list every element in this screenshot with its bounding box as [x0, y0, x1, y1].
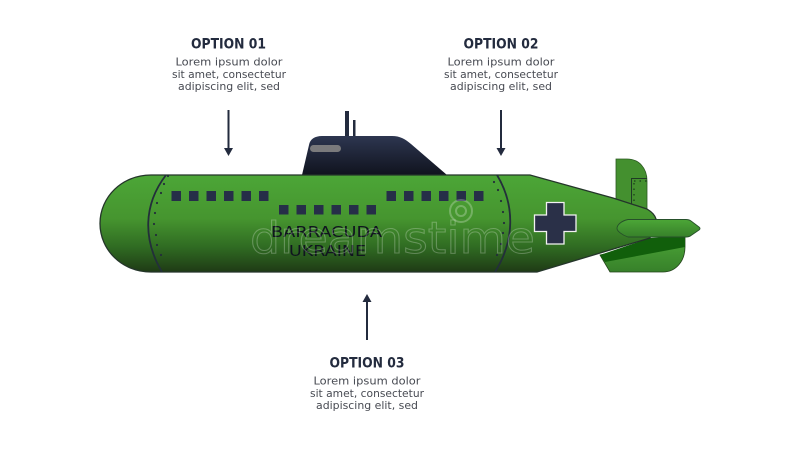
arrow: option 01 — [224, 110, 233, 156]
sail body — [302, 136, 447, 175]
option 02 text block: OPTION 02 — [464, 36, 538, 52]
lower rudder — [600, 236, 685, 272]
option 03 text block: Lorem ipsum dolor — [314, 374, 421, 388]
arrow: option 02 — [496, 110, 506, 156]
arrow: option 03 — [362, 294, 372, 340]
hull — [100, 175, 656, 272]
periscopes — [345, 111, 356, 137]
option 02 text block: adipiscing elit, sed — [450, 80, 552, 93]
option 03 text block — [310, 356, 424, 412]
hull name — [271, 223, 383, 260]
right bulkhead seam — [493, 175, 510, 272]
watermark: dreamstime — [250, 213, 535, 264]
option 02 text block: sit amet, consectetur — [444, 68, 558, 81]
window row left — [172, 191, 268, 201]
option 01 text block: adipiscing elit, sed — [178, 80, 280, 93]
submarine — [100, 111, 700, 272]
option 02 text block: Lorem ipsum dolor — [448, 56, 555, 68]
cross emblem — [534, 202, 576, 244]
option 03 text block: sit amet, consectetur — [310, 387, 424, 400]
hull name: UKRAINE — [289, 242, 366, 260]
conning tower — [302, 111, 447, 175]
stabilizer — [617, 220, 700, 237]
upper rudder — [616, 159, 647, 213]
window row right — [386, 191, 484, 201]
sail highlight — [310, 145, 341, 152]
hull name: BARRACUDA — [271, 223, 383, 241]
option 01 text block: sit amet, consectetur — [172, 68, 286, 81]
option 03 text block: adipiscing elit, sed — [316, 399, 418, 412]
option 02 text block — [444, 36, 558, 93]
window row centre — [279, 205, 376, 214]
left bulkhead seam — [148, 175, 169, 272]
option 01 text block — [172, 36, 286, 93]
option 01 text block: OPTION 01 — [191, 36, 266, 52]
option 03 text block: OPTION 03 — [330, 356, 404, 372]
option 01 text block: Lorem ipsum dolor — [176, 56, 283, 68]
